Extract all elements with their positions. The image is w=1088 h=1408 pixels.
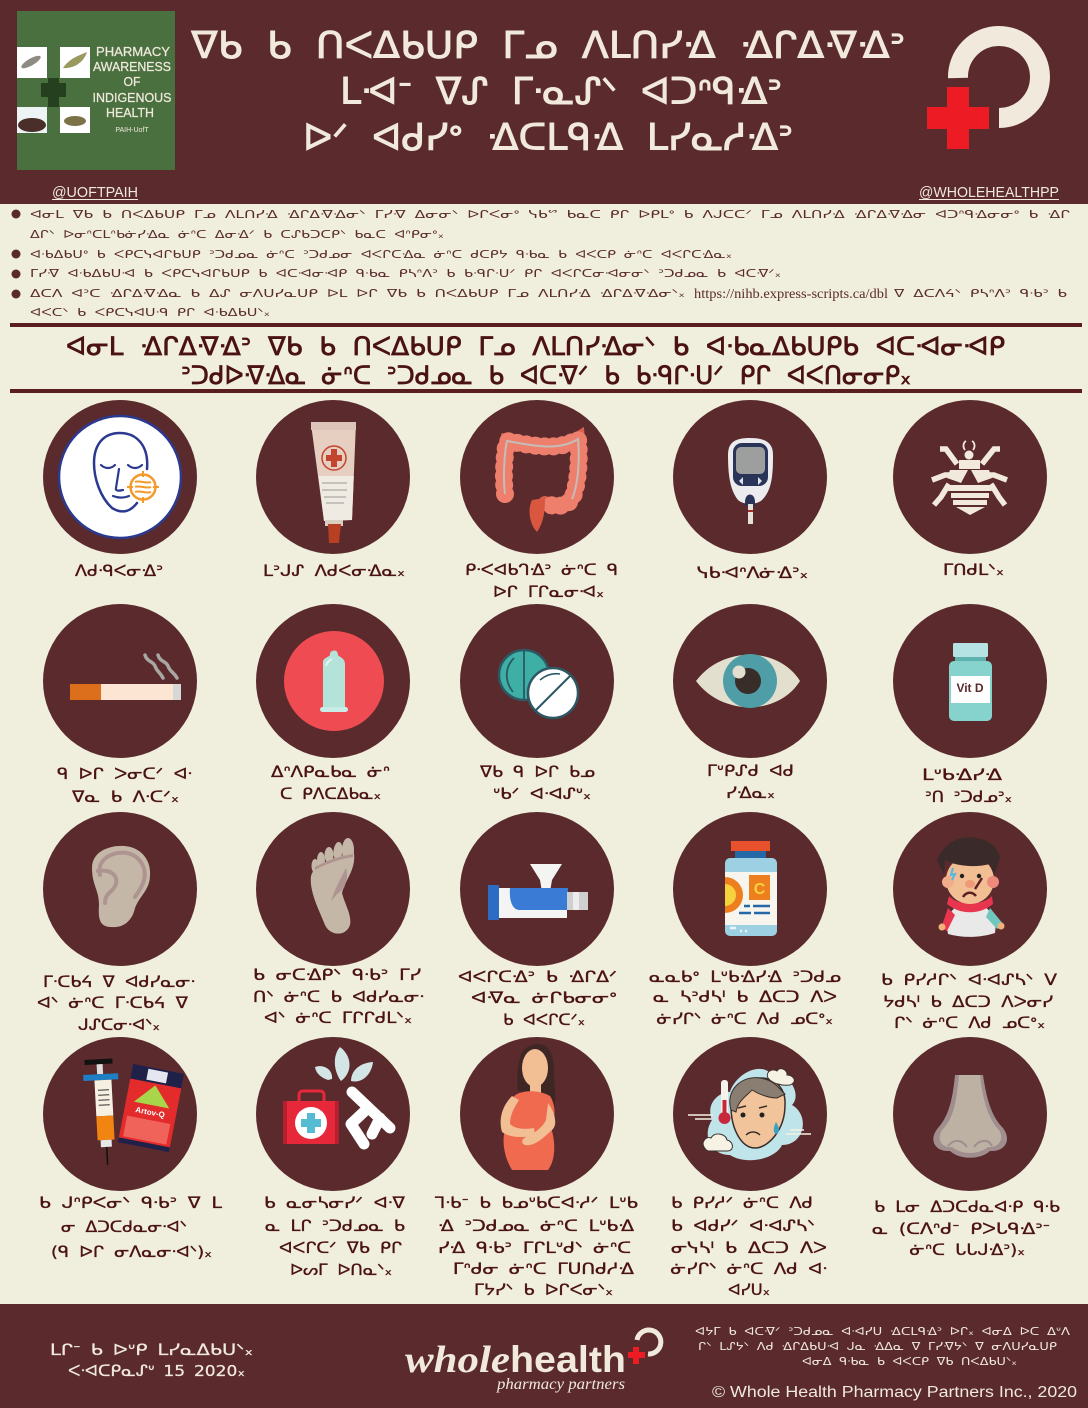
icon: vitamin C bottle: C	[754, 881, 766, 898]
logo: pharmacy awareness of indigenous health: PHARMACY	[96, 45, 171, 59]
icon: condom	[284, 631, 384, 731]
logo: pharmacy awareness of indigenous health: PAIH-UofT	[115, 127, 149, 134]
item: lice	[893, 400, 1047, 579]
item: ear	[37, 812, 197, 1034]
label: ᒥᐢᑯᓂ ᓃᐢᑕ ᒥᑌᑎᑯᓱᐎ	[453, 1260, 634, 1278]
label: ᓇ (ᑕᐱᐢᑯᐨ ᑭᐳᒐᑫᐎᐣᐨ	[872, 1220, 1050, 1238]
logo: whole health pharmacy partners	[405, 1330, 661, 1393]
icon: louse	[932, 441, 1007, 515]
label: ᑲ ᒍᐢᑭᐸᓂᐠ ᑫᐧᑲᐣ ᐁ ᒪ	[39, 1194, 222, 1212]
item: pills	[460, 604, 614, 803]
item: first aid and wound care	[256, 1037, 410, 1279]
label	[458, 968, 617, 1029]
title: ᐅᐟ ᐊᑯᓯᐤ ᐎᑕᒪᑫᐎ ᒪᓯᓇᓱᐎᐣ	[303, 118, 793, 159]
label: ᑎᐠ ᓃᐢᑕ ᑲ ᐊᑯᓯᓇᓂᐧ	[253, 988, 424, 1006]
label: ᑲ ᓇᓂᓴᓂᓯᐟ ᐊᐧᐁ	[264, 1194, 405, 1212]
item: smoking	[43, 604, 197, 806]
item: inhaler	[458, 812, 617, 1029]
logo: whole health pharmacy partners: whole	[405, 1339, 510, 1381]
title	[191, 26, 905, 159]
label: ᓂᓭᓴᑊ ᑲ ᐃᑕᑐ ᐱᐳ	[671, 1239, 827, 1257]
label: ᑲ ᒪᓂ ᐃᑐᑕᑯᓇᐊᐧᑭ ᑫᐧᑲ	[874, 1198, 1060, 1216]
logo: pharmacy awareness of indigenous health: INDIGENOUS	[92, 91, 172, 105]
label: ᐁᓇ ᑲ ᐱᐧᑕᐟ᙮	[72, 788, 179, 806]
icon: foot	[311, 838, 354, 934]
label: ᓯᐎᓇ᙮	[726, 784, 775, 802]
item: nose	[872, 1037, 1060, 1259]
label: ᐣᑎ ᐣᑐᑯᓄᐣ᙮	[925, 788, 1012, 806]
text block: bullet points: ᐊᐸᑕᐠ ᑲ ᐸᑭᑕᓭᐊᑌᐧᑫ ᑭᒋ ᐊᐧᑲᐃᑲᑌᐠ᙮	[30, 305, 270, 319]
label	[434, 1194, 638, 1299]
label: ᓇ ᓴᐣᑯᓴᑊ ᑲ ᐃᑕᑐ ᐱᐳ	[653, 988, 837, 1006]
icon: pregnant woman	[501, 1044, 555, 1170]
label: ᒍᔑᑕᓂᐧᐊᐠ᙮	[78, 1016, 160, 1034]
icon: vitamin D bottle	[949, 643, 992, 721]
text block: bullet points: https://nihb.express-scripts.ca/dbl	[694, 287, 888, 302]
icon: vitamin D bottle: Vit D	[956, 681, 984, 695]
label: ᒪᐣᒍᔑ ᐱᑯᐸᓂᐎᓇ᙮	[263, 562, 405, 580]
label: ᑲ ᑭᓯᓱᐟ ᓃᐢᑕ ᐱᑯ	[671, 1194, 813, 1212]
label	[253, 966, 424, 1027]
logo: whole health mark	[927, 36, 1040, 149]
icon: face with target	[59, 416, 181, 538]
item: vitamin D	[893, 604, 1047, 806]
heading: list of covered products: ᐣᑐᑯᐅᐌᐎᓇ ᓃᐢᑕ ᐣᑐᑯᓄᓇ ᑲ ᐊᑕᐌᐟ ᑲ ᑲᐧᑫᒋᐧᑌᐟ ᑭᒋ ᐊᐸᑎᓂᓂᑭ᙮	[181, 361, 911, 390]
text block: bullet points: ᒥᓯᐌ ᐊᐧᑲᐃᑲᑌᐗ ᑲ ᐸᑭᑕᓭᐊᒋᑲᑌᑭ ᑲ ᐊᑕᐗᓂᐗᑭ ᑫᐧᑲᓇ ᑭᓴᐢᐱᐣ ᑲ ᑲᐧᑫᒋᐧᑌᐟ ᑭᒋ ᐊᐸᒋᑕᓂᐗᓂᓂᐠ ᐣᑐᑯᓄᓇ ᑲ ᐊᑕᐌᐟ᙮	[30, 266, 781, 280]
item: eye	[673, 604, 827, 802]
icon: dental device	[488, 864, 588, 920]
text block: last updated: ᐸᐧᐊᑕᑭᓇᔑᐡ 15 2020᙮	[68, 1362, 245, 1380]
label: ᓇᓇᑲᐤ ᒪᐡᑲᐎᓯᐎ ᐣᑐᑯᓄ	[649, 968, 841, 986]
panel: footer band	[0, 1304, 1088, 1408]
text block: bullet points: ᐃᒋᐠ ᐅᓂᐢᑕᒪᐢᑲᓃᓯᐎᓇ ᓃᐢᑕ ᐃᓂᐎᐟ ᑲ ᑕᔑᑲᑐᑕᑭᐠ ᑲᓇᑕ ᐊᐢᑭᓂᐤ᙮	[30, 227, 444, 241]
label: ᐅᔕᒥ ᐅᑎᓇᐠ᙮	[290, 1261, 392, 1279]
heading: list of covered products: ᐊᓂᒪ ᐎᒋᐃᐌᐎᐣ ᐁᑲ ᑲ ᑎᐸᐃᑲᑌᑭ ᒥᓄ ᐱᒪᑎᓯᐎᓂᐠ ᑲ ᐊᐧᑲᓇᐃᑲᑌᑭᑲ ᐊᑕᐗᓂᐗᑭ	[66, 332, 1005, 361]
label	[465, 561, 618, 601]
item: injection and malaria	[39, 1037, 222, 1261]
icon: glucose meter	[728, 438, 773, 524]
label: ᐊᐸᒋᑕᐟ ᐁᑲ ᑭᒋ	[279, 1239, 402, 1257]
label	[37, 973, 195, 1034]
label: ᒪᐡᑲᐎᓯᐎ	[922, 766, 1002, 784]
text block: bullet points: ᐁ ᐃᑕᐱᔦᐠ ᑭᓴᐢᐱᐣ ᑫᐧᑲᐣ ᑲ	[894, 286, 1067, 300]
label: ᓭᑲᐗᐢᐱᓃᐎᐣ᙮	[697, 564, 808, 582]
item: foot	[253, 812, 424, 1027]
item: vitamin C	[649, 812, 841, 1028]
item: sick child	[881, 812, 1057, 1032]
icon: nose	[933, 1075, 1007, 1158]
label: ᒥᔭᓯᐠ ᑲ ᐅᒋᐸᓂᐠ᙮	[474, 1281, 613, 1299]
item: bowel	[460, 400, 618, 601]
label: ᐊᐠ ᓃᐢᑕ ᒥᒋᒋᑯᒪᐠ᙮	[264, 1009, 412, 1027]
icon: syringe and box	[82, 1058, 184, 1166]
label	[881, 971, 1057, 1032]
logo: whole health pharmacy partners: pharmacy partners	[496, 1376, 625, 1393]
icon: eye	[696, 654, 800, 708]
text block: bullet points: ᐊᐧᑲᐃᑲᑌᐤ ᑲ ᐸᑭᑕᓭᐊᒋᑲᑌᑭ ᐣᑐᑯᓄᓇ ᓃᐢᑕ ᐣᑐᑯᓄᓂ ᐊᐸᒋᑕᐎᓇ ᓃᐢᑕ ᑯᑕᑭᔭ ᑫᐧᑲᓇ ᑲ ᐊᐸᑕᑭ ᓃᐢᑕ ᐊᐸᒋᑕᐎᓇ᙮	[30, 247, 732, 261]
label: ᒣᐧᑲᐨ ᑲ ᑲᓄᐡᑲᑕᐊᐧᓱᐟ ᒪᐡᑲ	[434, 1194, 638, 1212]
label: ᐊᓯᑌ᙮	[728, 1281, 770, 1299]
label: ᓂ ᐃᑐᑕᑯᓇᓂᐧᐊᐠ	[61, 1218, 187, 1236]
icon: tablets	[499, 650, 578, 718]
label: (ᑫ ᐅᒋ ᓂᐱᓇᓂᐧᐊᐠ)᙮	[51, 1243, 212, 1261]
text block: last updated: ᒪᒋᐨ ᑲ ᐅᐡᑭ ᒪᓯᓇᐃᑲᑌᐠ᙮	[50, 1341, 253, 1359]
label: ᑕ ᑭᐱᑕᐃᑲᓇ᙮	[280, 785, 381, 803]
panel: item grid	[37, 400, 1060, 1299]
icon: cigarette	[70, 655, 181, 700]
item: medicated cream	[256, 400, 410, 580]
label	[57, 765, 192, 806]
text block: bullet points: ᐊᓂᒪ ᐁᑲ ᑲ ᑎᐸᐃᑲᑌᑭ ᒥᓄ ᐱᒪᑎᓯᐎ ᐎᒋᐃᐌᐎᓂᐠ ᒥᓯᐌ ᐃᓂᓂᐠ ᐅᒋᐸᓂᐤ ᓭᑲᔥ ᑲᓇᑕ ᑭᒋ ᐅᑭᒪᐤ ᑲ ᐱᒍᑕᑕᐟ ᒥᓄ ᐱᒪᑎᓯᐎ ᐎᒋᐃᐌᐎᓂ ᐊᑐᐢᑫᐎᓂᓂᐤ ᑲ ᐎᒋ	[30, 207, 1070, 221]
label	[922, 766, 1012, 806]
label: ᐊᐠ ᓃᐢᑕ ᒥᐧᑕᑲᔦ ᐁ	[37, 994, 188, 1012]
label: ᑫ ᐅᒋ ᐳᓂᑕᐟ ᐊᐧ	[57, 765, 192, 783]
text block: footer note: ᒋᐠ ᒪᔑᔭᐠ ᐱᑯ ᐎᒋᐃᑲᑌᐗ ᒍᓇ ᐎᐃᓇ ᐁ ᒥᓯᐌᔭᐠ ᐁ ᓂᐱᑌᓯᓇᑌᑭ	[698, 1340, 1057, 1353]
text block: last updated	[50, 1341, 253, 1380]
label	[671, 1194, 827, 1299]
icon: ear	[92, 846, 150, 927]
label: ᒥᐧᑕᑲᔦ ᐁ ᐊᑯᓯᓇᓂᐧ	[43, 973, 195, 991]
label: ᒋᐠ ᓃᐢᑕ ᐱᑯ ᓄᑕᐤ᙮	[894, 1014, 1045, 1032]
logo: pharmacy awareness of indigenous health	[17, 11, 175, 170]
item: pregnancy	[434, 1037, 638, 1299]
label: ᐡᑲᐟ ᐊᐧᐊᔑᐡ᙮	[493, 785, 591, 803]
label: ᓃᓯᒋᐠ ᓃᐢᑕ ᐱᑯ ᐊᐧ	[671, 1260, 827, 1278]
label: ᔭᑯᓴᑊ ᑲ ᐃᑕᑐ ᐱᐳᓂᓯ	[883, 993, 1053, 1011]
label: ᒥᐡᑭᔑᑯ ᐊᑯ	[707, 762, 794, 780]
label: ᑲ ᐊᐸᒋᑕᐟ᙮	[503, 1011, 585, 1029]
icon: sick boy	[937, 837, 1004, 937]
label	[707, 762, 794, 802]
label: ᐁᑲ ᑫ ᐅᒋ ᑲᓄ	[480, 763, 595, 781]
social handle: uoft: @UOFTPAIH	[52, 184, 138, 201]
social handle: whole health: @WHOLEHEALTHPP	[919, 184, 1059, 201]
icon: ointment tube	[311, 422, 356, 543]
panel: header banner	[0, 0, 1088, 204]
item: skin face	[43, 400, 197, 580]
label: ᑲ ᐊᑯᓯᐟ ᐊᐧᐊᔑᓴᐠ	[671, 1217, 815, 1235]
label	[39, 1194, 222, 1261]
label: ᒥᑎᑯᒪᐠ᙮	[943, 561, 1004, 579]
label	[271, 763, 390, 803]
label	[264, 1194, 405, 1279]
logo: pharmacy awareness of indigenous health: AWARENESS	[93, 60, 171, 74]
logo: pharmacy awareness of indigenous health: HEALTH	[106, 106, 154, 120]
item: diabetes	[673, 400, 827, 582]
heading: list of covered products	[10, 323, 1082, 393]
label	[480, 763, 595, 803]
label: ᓇ ᒪᒋ ᐣᑐᑯᓄᓇ ᑲ	[265, 1217, 405, 1235]
logo: pharmacy awareness of indigenous health: OF	[124, 75, 141, 89]
label	[649, 968, 841, 1028]
icon: syringe and box: Artov-Q	[135, 1105, 166, 1120]
item: fever	[671, 1037, 827, 1299]
label: ᑲ ᓂᑕᐎᑭᐠ ᑫᐧᑲᐣ ᒥᓯ	[253, 966, 421, 984]
item: contraceptives	[256, 604, 410, 803]
text block: footer note: ᐊᔭᒥ ᑲ ᐊᑕᐌᐟ ᐣᑐᑯᓄᓇ ᐊᐧᐊᓯᑌ ᐎᑕᒪᑫᐎᐣ ᐅᒋ᙮ ᐊᓂᐃ ᐅᑕ ᐃᐡᐱ	[695, 1325, 1071, 1338]
label: ᓃᐢᑕ ᒐᒐᒍᐎᐣ)᙮	[910, 1241, 1025, 1259]
copyright: © Whole Health Pharmacy Partners Inc., 2020	[712, 1384, 1077, 1401]
label: ᐃᐢᐱᑭᓇᑲᓇ ᓃᐢ	[271, 763, 390, 781]
label: ᓃᓯᒋᐠ ᓃᐢᑕ ᐱᑯ ᓄᑕᐤ᙮	[657, 1010, 833, 1028]
text block: footer note	[695, 1325, 1071, 1368]
text block: bullet points: ᐃᑕᐱ ᐊᐣᑕ ᐎᒋᐃᐌᐎᓇ ᑲ ᐃᔑ ᓂᐱᑌᓯᓇᑌᑭ ᐅᒪ ᐅᒋ ᐁᑲ ᑲ ᑎᐸᐃᑲᑌᑭ ᒥᓄ ᐱᒪᑎᓯᐎ ᐎᒋᐃᐌᐎᓂᐠ᙮	[30, 286, 685, 300]
title: ᒪᐗᐨ ᐁᔑ ᒥᐧᓇᔑᐠ ᐊᑐᐢᑫᐎᐣ	[340, 72, 782, 113]
text block: footer note: ᐊᓂᐃ ᑫᐧᑲᓇ ᑲ ᐊᐸᑕᑭ ᐁᑲ ᑎᐸᐃᑲᑌᐠ᙮	[802, 1355, 1017, 1368]
logo: whole health pharmacy partners: health	[510, 1339, 626, 1380]
icon: colon	[504, 439, 579, 532]
label: ᐎ ᐣᑐᑯᓄᓇ ᓃᐢᑕ ᒪᐡᑲᐎ	[438, 1217, 634, 1235]
label: ᐱᑯᐧᑫᐸᓂᐎᐣ	[75, 562, 163, 580]
label: ᑭᐧᐸᐊᑲᒉᐎᐣ ᓃᐢᑕ ᑫ	[465, 561, 618, 579]
label	[872, 1198, 1060, 1259]
title: ᐁᑲ ᑲ ᑎᐸᐃᑲᑌᑭ ᒥᓄ ᐱᒪᑎᓯᐎ ᐎᒋᐃᐌᐎᐣ	[191, 26, 905, 67]
icon: vitamin C bottle	[725, 841, 777, 936]
icon: first aid kit and hand	[283, 1047, 390, 1144]
label: ᑲ ᑭᓯᓱᒋᐠ ᐊᐧᐊᔑᓴᐠ ᐯ	[881, 971, 1057, 989]
text block: bullet points	[12, 207, 1070, 319]
icon: sick man with thermometer	[688, 1069, 811, 1160]
label: ᐊᐌᓇ ᓃᒋᑲᓂᓂᐤ	[471, 989, 617, 1007]
label: ᓯᐎ ᑫᐧᑲᐣ ᒥᒋᒪᐡᑯᐠ ᓃᐢᑕ	[438, 1239, 631, 1257]
label: ᐊᐸᒋᑕᐎᐣ ᑲ ᐎᒋᐃᐟ	[458, 968, 617, 986]
label: ᐅᒋ ᒥᒋᓇᓂᐗ᙮	[493, 583, 604, 601]
